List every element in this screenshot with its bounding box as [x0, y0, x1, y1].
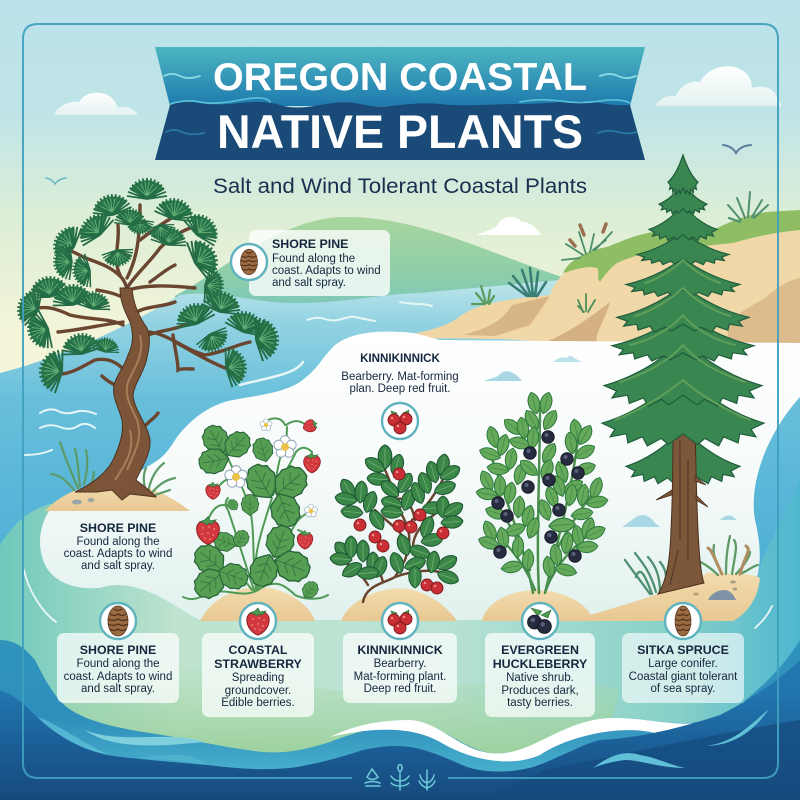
plant: shore pine	[11, 178, 283, 500]
white streaks	[24, 570, 772, 628]
spruce grass	[625, 536, 758, 594]
rock	[708, 590, 736, 600]
deep blue wave	[0, 660, 800, 800]
heading: KINNIKINNICK	[360, 352, 441, 365]
plant: evergreen huckleberry	[475, 391, 609, 593]
card: evergreen huckleberry: Produces dark,	[501, 685, 579, 697]
card: shore pine: SHORE PINE	[80, 643, 156, 657]
strawberry stems	[183, 418, 328, 599]
card: coastal strawberry: Spreading	[232, 672, 284, 684]
bearberry leaves	[330, 445, 466, 588]
strawberries	[197, 418, 320, 549]
card: kinnikinnick: KINNIKINNICK	[357, 643, 443, 657]
spruce boughs	[602, 155, 764, 446]
card: coastal strawberry: STRAWBERRY	[214, 657, 303, 671]
card: kinnikinnick: Deep red fruit.	[364, 683, 436, 695]
card: kinnikinnick: Mat-forming plant.	[354, 671, 446, 683]
bough highlights	[615, 260, 750, 420]
icon: bearberries	[382, 603, 418, 639]
mid-blue wave	[0, 640, 800, 800]
description: coast. Adapts to wind	[64, 548, 172, 560]
stubs	[656, 476, 708, 507]
card: evergreen huckleberry: EVERGREEN	[501, 643, 579, 657]
card: sitka spruce: Coastal giant tolerant	[629, 671, 738, 683]
huckleberry stems	[487, 403, 595, 593]
callout: shore pine top	[231, 230, 390, 296]
icon: strawberry	[240, 603, 276, 639]
banner: title ribbon	[155, 47, 645, 160]
icon: spruce cone	[665, 603, 701, 639]
ribbon lower band	[155, 101, 645, 160]
title line one: OREGON COASTAL	[213, 56, 587, 99]
lower green band	[0, 480, 800, 760]
white wave crest	[330, 700, 745, 761]
icon: huckleberries	[522, 603, 558, 639]
ocean	[0, 280, 800, 800]
description: Found along the	[76, 536, 160, 548]
card: shore pine: coast. Adapts to wind	[64, 671, 172, 683]
card: shore pine	[57, 633, 179, 703]
description: plan. Deep red fruit.	[349, 383, 451, 395]
subtitle: Salt and Wind Tolerant Coastal Plants	[213, 175, 587, 198]
card: evergreen huckleberry: HUCKLEBERRY	[493, 657, 588, 671]
card: sitka spruce: SITKA SPRUCE	[637, 643, 729, 657]
callout text: SHORE PINE	[272, 237, 348, 251]
ribbon upper band	[155, 47, 645, 106]
sand mound: shore pine	[45, 483, 190, 511]
card: coastal strawberry: groundcover.	[225, 685, 291, 697]
shore pine trunk	[75, 288, 156, 500]
sky cloud over hill	[477, 217, 541, 235]
callout text: coast. Adapts to wind	[272, 265, 381, 277]
plant: coastal strawberry	[183, 418, 328, 604]
card: coastal strawberry: COASTAL	[229, 643, 288, 657]
white panel area	[39, 332, 800, 620]
wave highlights	[38, 709, 769, 768]
callout card	[249, 230, 390, 296]
birds	[46, 145, 751, 184]
card: coastal strawberry: Edible berries.	[221, 697, 295, 709]
sand mounds: plants	[200, 572, 760, 621]
footer icons	[365, 764, 435, 790]
bearberry branches	[345, 470, 445, 602]
icon: berries	[382, 403, 418, 439]
card: shore pine: Found along the	[76, 658, 160, 670]
spruce trunk	[658, 420, 704, 594]
description: and salt spray.	[81, 560, 155, 572]
trunk bark	[670, 440, 688, 585]
card: sitka spruce: Large conifer.	[648, 658, 718, 670]
callout text: and salt spray.	[272, 277, 346, 289]
callout: kinnikinnick mid	[341, 352, 459, 439]
plant: kinnikinnick bush	[330, 445, 466, 602]
heading: SHORE PINE	[80, 521, 156, 535]
pine needles	[11, 178, 283, 394]
shore pine grass	[51, 442, 175, 495]
card: coastal strawberry	[202, 633, 314, 717]
card: evergreen huckleberry: Native shrub.	[506, 672, 574, 684]
huckleberry leaves	[475, 391, 609, 579]
cloud: right	[655, 66, 782, 106]
card: evergreen huckleberry	[485, 633, 595, 717]
strawberry flowers	[225, 419, 318, 517]
small clouds in panel	[484, 356, 737, 527]
card: shore pine: and salt spray.	[81, 683, 155, 695]
card: kinnikinnick	[343, 633, 457, 703]
pine branches	[30, 205, 250, 425]
callout pine cone icon	[231, 244, 267, 280]
grass tufts and cattails on dune	[472, 192, 768, 312]
ribbon wave lines	[164, 74, 636, 134]
far green hill	[175, 217, 565, 305]
water ripples	[25, 302, 432, 455]
card: sitka spruce: of sea spray.	[650, 683, 716, 695]
card: kinnikinnick: Bearberry.	[374, 658, 426, 670]
lowest bough	[626, 428, 740, 484]
sand flecks	[693, 580, 737, 596]
bark lines	[115, 335, 141, 480]
grass cap on dune	[563, 210, 800, 282]
huckleberries	[492, 431, 584, 562]
icon: pine cone	[100, 603, 136, 639]
callout text: Found along the	[272, 253, 355, 265]
band shading	[60, 669, 620, 760]
card: evergreen huckleberry: tasty berries.	[507, 697, 573, 709]
darkest sea corner	[480, 720, 800, 800]
right coastal dune	[400, 210, 800, 344]
strawberry leaves	[188, 421, 322, 604]
cloud: left	[54, 93, 138, 115]
title line two: NATIVE PLANTS	[217, 105, 583, 158]
bearberry fruit	[354, 468, 449, 594]
description: Bearberry. Mat-forming	[341, 371, 459, 383]
card: sitka spruce	[622, 633, 744, 703]
callout: shore pine mid	[64, 521, 172, 572]
plant: sitka spruce	[602, 155, 764, 600]
